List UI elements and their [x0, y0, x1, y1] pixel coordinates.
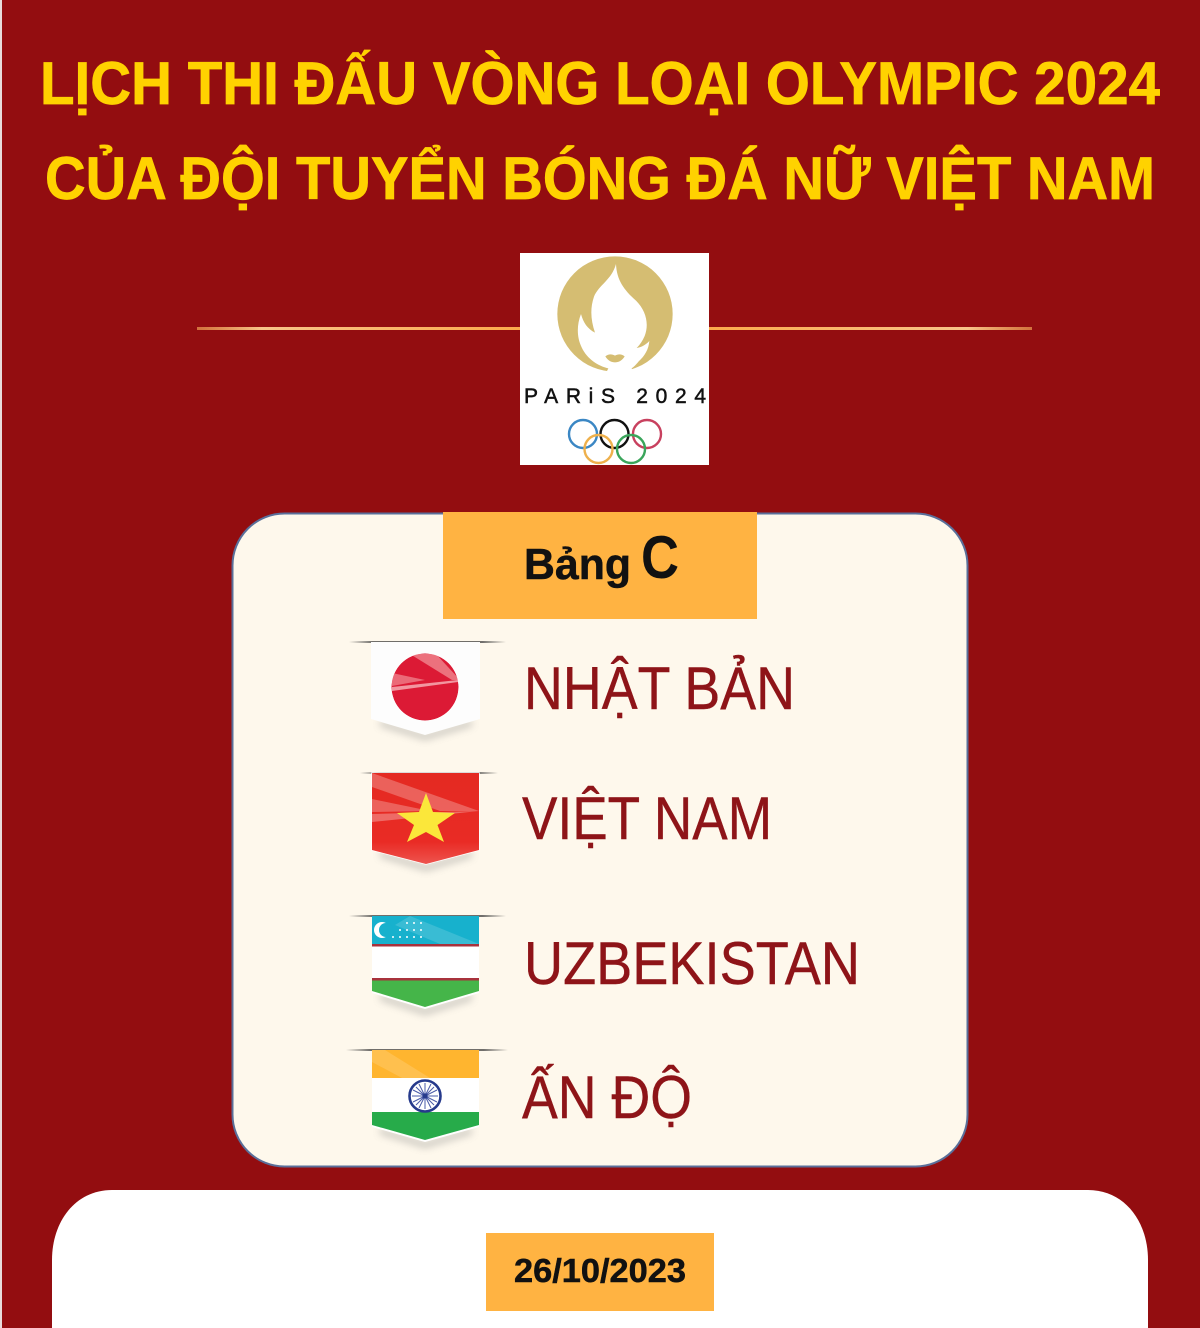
group heading: Bảng — [524, 540, 631, 589]
team list: NHẬT BẢN — [524, 655, 795, 722]
logo wordmark: PARiS 2024 — [524, 385, 706, 408]
team list — [522, 655, 860, 1131]
flag: Japan — [349, 641, 506, 740]
date badge — [486, 1233, 714, 1311]
team list: VIỆT NAM — [522, 785, 772, 852]
title: CỦA ĐỘI TUYỂN BÓNG ĐÁ NỮ VIỆT NAM — [45, 145, 1155, 212]
team list: ẤN ĐỘ — [522, 1064, 692, 1131]
group heading — [443, 512, 757, 619]
flag: India — [346, 1049, 508, 1148]
divider line right — [709, 327, 1032, 330]
date badge: 26/10/2023 — [514, 1252, 686, 1289]
panel: group C — [232, 512, 968, 1166]
flag: Uzbekistan — [349, 915, 506, 1015]
Paris 2024 logo — [520, 253, 709, 465]
group heading: C — [641, 524, 679, 591]
panel: match schedule — [52, 1190, 1148, 1328]
flag: Vietnam — [360, 772, 498, 871]
icon: medallion with flame — [557, 256, 673, 375]
team list: UZBEKISTAN — [524, 930, 860, 997]
title: LỊCH THI ĐẤU VÒNG LOẠI OLYMPIC 2024 — [40, 50, 1161, 117]
title — [40, 50, 1161, 212]
divider line left — [197, 327, 520, 330]
icon: Olympic rings — [569, 420, 661, 463]
